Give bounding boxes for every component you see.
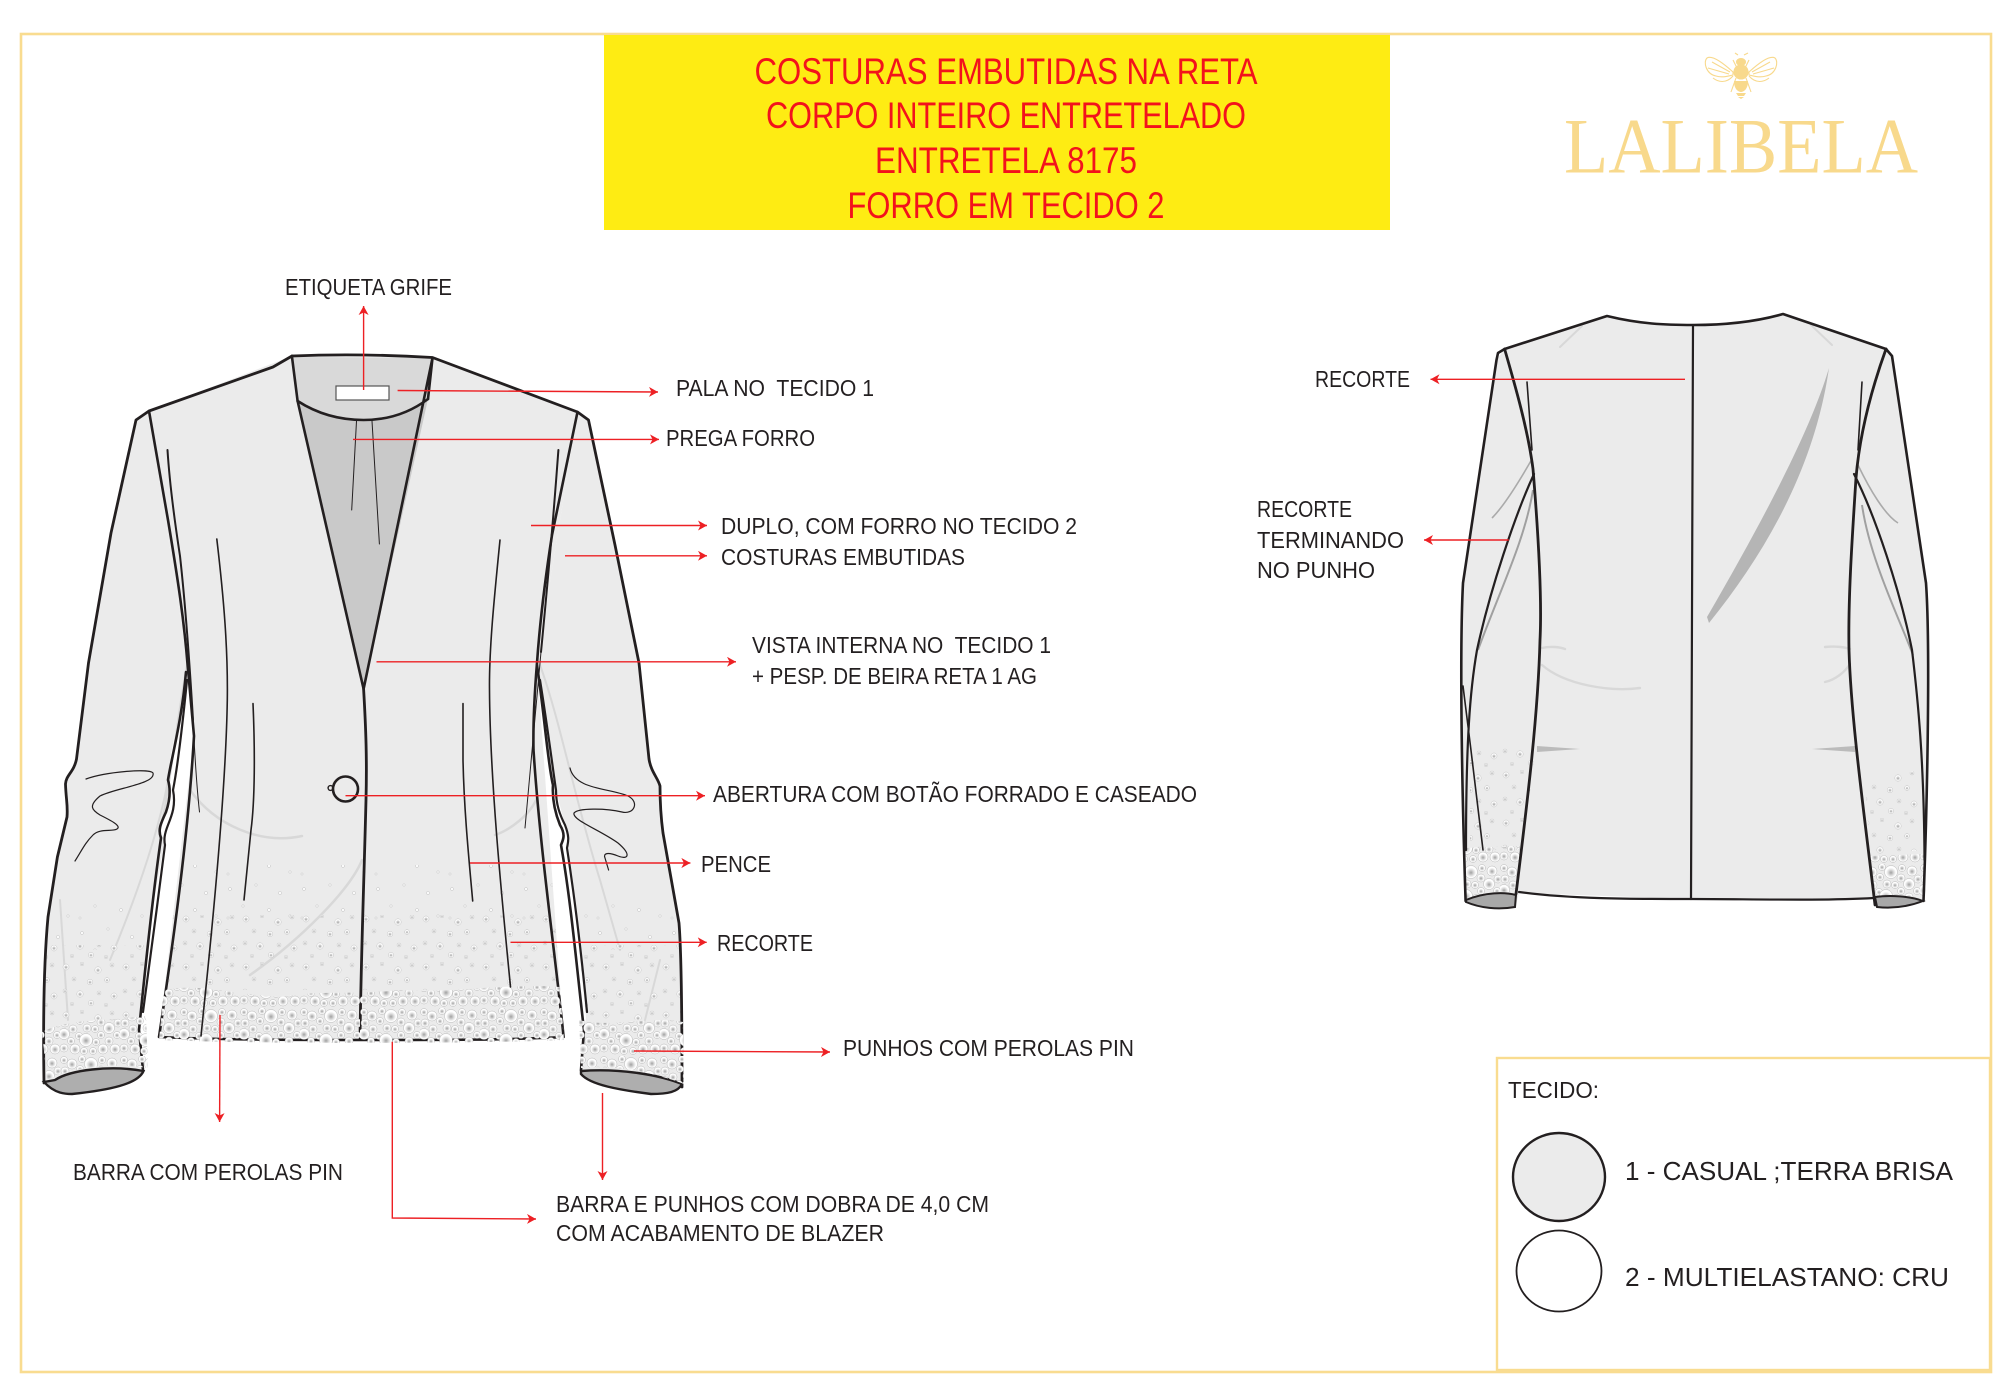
logo: Lalibela: LALIBELA <box>1564 102 1918 190</box>
label: barra: BARRA COM PEROLAS PIN <box>73 1159 343 1185</box>
seams and darts <box>168 421 558 1036</box>
icon: bee <box>1705 53 1777 99</box>
label: prega forro: PREGA FORRO <box>666 425 815 451</box>
label: recorte terminando no punho: NO PUNHO <box>1257 557 1375 583</box>
title banner: CORPO INTEIRO ENTRETELADO <box>766 95 1246 136</box>
back cuffs <box>1466 893 1923 908</box>
arrow: duplo <box>531 524 707 526</box>
label: recorte terminando no punho: RECORTE <box>1257 496 1352 522</box>
logo: Lalibela <box>1564 53 1918 190</box>
scattered pearls <box>160 865 570 990</box>
sleeve wrinkles <box>75 768 635 870</box>
label: etiqueta grife: ETIQUETA GRIFE <box>285 274 452 300</box>
arrow: barra <box>219 1015 221 1122</box>
label: recorte back: RECORTE <box>1315 366 1410 392</box>
hem and cuff pearl bands <box>42 986 684 1084</box>
swatch: fabric 2 <box>1516 1230 1602 1312</box>
title banner <box>604 35 1390 230</box>
arrow: pence <box>470 862 690 864</box>
arrow: acabamento <box>392 1042 536 1219</box>
arrow: vista interna <box>376 661 736 663</box>
label: vista interna: VISTA INTERNA NO TECIDO 1 <box>752 632 1051 658</box>
title banner: COSTURAS EMBUTIDAS NA RETA <box>754 51 1258 92</box>
arrow: barra e punhos <box>602 1093 604 1180</box>
arrow: recorte <box>510 941 707 943</box>
legend text 2: 2 - MULTIELASTANO: CRU <box>1625 1262 1949 1292</box>
label: vista interna <box>752 632 1051 689</box>
label: recorte terminando no punho: TERMINANDO <box>1257 527 1404 553</box>
panel: tecido legend <box>1497 1058 1990 1370</box>
swatch: fabric 1 <box>1513 1133 1605 1221</box>
label: pala: PALA NO TECIDO 1 <box>676 375 874 401</box>
arrow: punhos <box>634 1051 830 1052</box>
title banner: FORRO EM TECIDO 2 <box>848 185 1164 226</box>
back pearls <box>1464 745 1926 900</box>
arrow: recorte punho <box>1424 539 1509 541</box>
arrow: prega forro <box>353 438 659 440</box>
label: recorte terminando no punho <box>1257 496 1404 583</box>
legend text 1: 1 - CASUAL ;TERRA BRISA <box>1625 1156 1954 1186</box>
right sleeve <box>537 412 682 1087</box>
arrow: abertura <box>346 795 705 797</box>
left sleeve <box>43 411 188 1083</box>
back shading <box>1478 325 1913 752</box>
label: barra e punhos <box>556 1191 989 1246</box>
button <box>328 776 358 802</box>
label: vista interna: + PESP. DE BEIRA RETA 1 AG <box>752 663 1037 689</box>
label: pence: PENCE <box>701 851 771 877</box>
arrow: costuras <box>565 555 707 557</box>
label: barra e punhos: COM ACABAMENTO DE BLAZER <box>556 1220 884 1246</box>
label: barra e punhos: BARRA E PUNHOS COM DOBRA DE 4,0 CM <box>556 1191 989 1217</box>
label: recorte: RECORTE <box>717 930 813 956</box>
title banner: ENTRETELA 8175 <box>875 140 1137 181</box>
soft wrinkles <box>60 665 660 1020</box>
label: costuras: COSTURAS EMBUTIDAS <box>721 544 965 570</box>
back body and sleeves fill <box>1461 314 1928 905</box>
neck yoke and lining <box>298 399 428 689</box>
back view jacket <box>1461 314 1928 908</box>
label: punhos: PUNHOS COM PEROLAS PIN <box>843 1035 1134 1061</box>
front view jacket <box>40 355 685 1094</box>
back outlines <box>1461 314 1928 905</box>
outlines <box>44 355 682 1087</box>
legend heading: TECIDO: <box>1508 1077 1599 1103</box>
body <box>149 356 578 1040</box>
label: duplo: DUPLO, COM FORRO NO TECIDO 2 <box>721 513 1077 539</box>
arrow: etiqueta grife <box>363 306 365 390</box>
label: abertura: ABERTURA COM BOTÃO FORRADO E CASEADO <box>713 781 1197 807</box>
brand label <box>336 386 389 400</box>
cuffs <box>44 1068 682 1094</box>
arrow: pala <box>398 390 658 392</box>
arrow: recorte back <box>1430 378 1685 380</box>
